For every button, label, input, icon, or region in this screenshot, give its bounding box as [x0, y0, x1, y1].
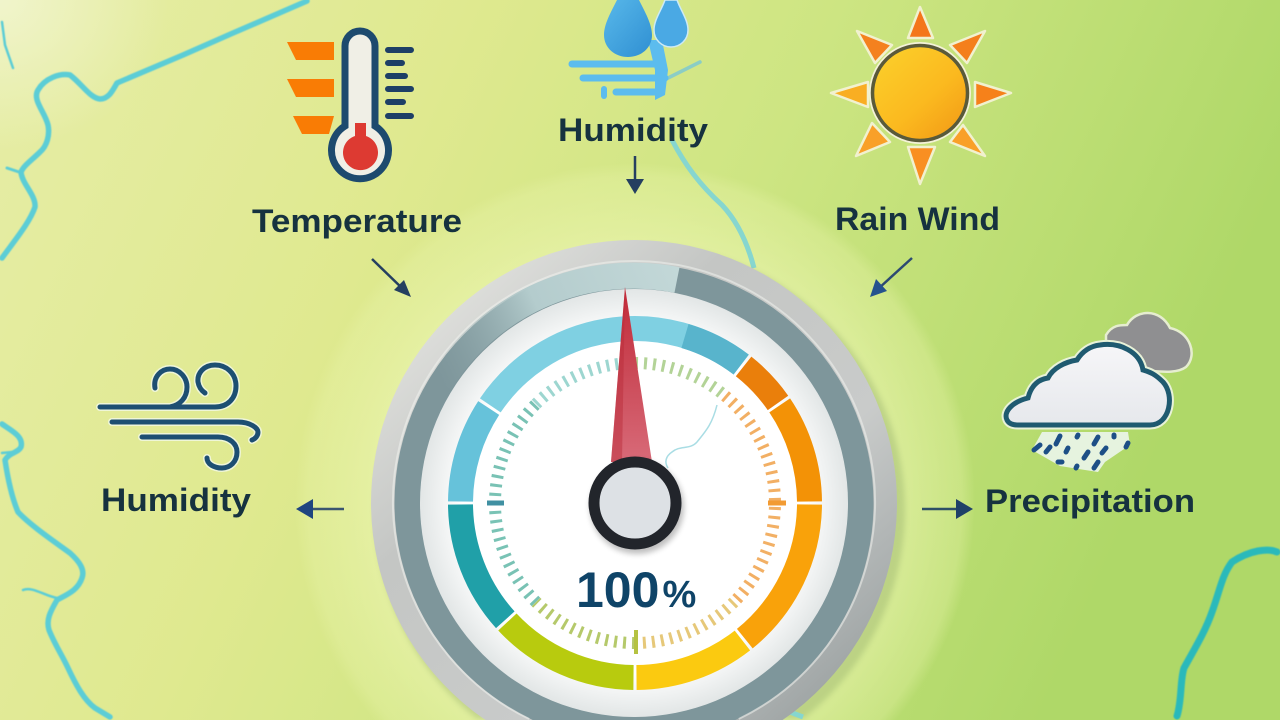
- icon: wind: [100, 365, 258, 468]
- arrow: humidity left: [296, 499, 344, 519]
- arrow: humidity top: [626, 156, 644, 194]
- arrow: precipitation: [922, 499, 973, 519]
- reading: 100%: [576, 562, 696, 618]
- coloured ring segments: [460, 329, 810, 678]
- arrow: rain wind: [870, 258, 912, 297]
- label: temperature: Temperature: [252, 203, 462, 239]
- icon: thermometer: [287, 31, 411, 179]
- crack: [666, 405, 717, 468]
- icon: water drops: [572, 0, 700, 100]
- label: precipitation: Precipitation: [985, 483, 1195, 519]
- needle: [611, 287, 652, 462]
- tick marks: [487, 363, 786, 654]
- central river: [672, 140, 754, 268]
- rain drops: [1032, 432, 1130, 472]
- icon: rain cloud: [1006, 313, 1192, 472]
- label: humidity left: Humidity: [101, 482, 251, 518]
- label: rain wind: Rain Wind: [835, 201, 1000, 237]
- label: humidity top: Humidity: [558, 112, 708, 148]
- arrow: temperature: [372, 259, 411, 297]
- gauge: [371, 240, 906, 720]
- hub: [590, 460, 684, 554]
- icon: sun: [831, 7, 1011, 184]
